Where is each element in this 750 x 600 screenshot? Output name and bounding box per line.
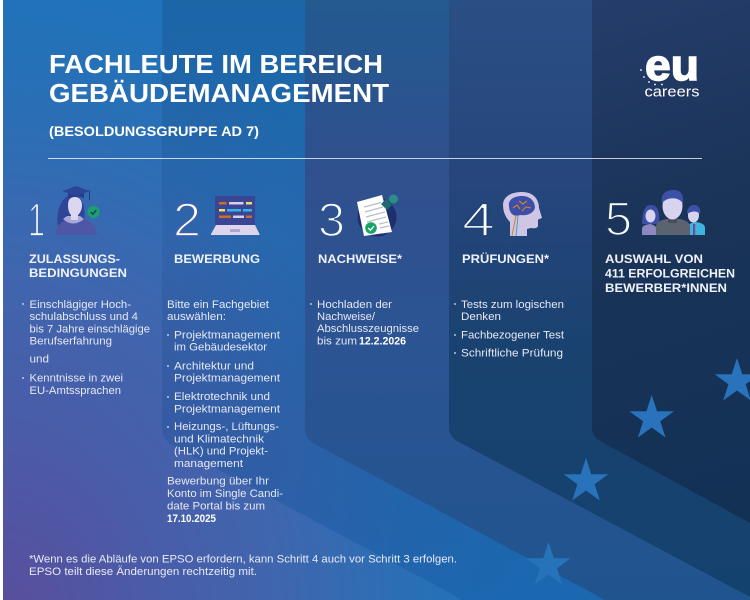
step 4 text: Schriftliche Prüfung	[461, 348, 563, 360]
step 1 text: EU-Amtssprachen	[30, 385, 121, 397]
step 5 heading: AUSWAHL VON	[605, 252, 703, 266]
icon: three people	[642, 190, 705, 235]
step 1 heading: BEDINGUNGEN	[29, 266, 127, 280]
number 1: 1	[28, 193, 45, 246]
step 1 text	[22, 299, 150, 397]
subtitle: (BESOLDUNGSGRUPPE AD 7)	[49, 123, 259, 139]
logo: EU careers: eu	[645, 41, 699, 90]
step 5 heading: BEWERBER*INNEN	[605, 281, 727, 295]
step 1 text: und	[30, 354, 49, 366]
step 2 text	[167, 299, 283, 525]
icon: laptop	[211, 196, 260, 235]
step 4 heading: PRÜFUNGEN*	[462, 251, 549, 266]
step 4 text: Denken	[461, 311, 501, 323]
step 5 heading	[605, 252, 735, 295]
title: FACHLEUTE IM BEREICH	[49, 51, 383, 79]
panel: step 3 column	[305, 0, 750, 600]
step 1 text: Einschlägiger Hoch-	[30, 299, 131, 311]
step 3 text: Hochladen der	[317, 299, 392, 311]
step 2 text: (HLK) und Projekt-	[174, 446, 268, 458]
step 3 text: Abschlusszeugnisse	[317, 323, 419, 335]
step 1 heading: ZULASSUNGS-	[29, 252, 120, 266]
step 2 text: im Gebäudesektor	[174, 342, 267, 354]
step 5 heading: 411 ERFOLGREICHEN	[605, 266, 735, 280]
step 3 text: bis zum	[317, 336, 357, 348]
step 2 text: Architektur und	[174, 360, 254, 372]
step 2 text: date Portal bis zum	[167, 500, 265, 512]
panel: step 2 column	[162, 0, 750, 600]
step 2 text: Bitte ein Fachgebiet	[167, 299, 269, 311]
step 3 text: Nachweise/	[317, 311, 375, 323]
step 4 text: Tests zum logischen	[461, 299, 564, 311]
step 2 text: und Klimatechnik	[174, 434, 265, 446]
star 1	[715, 358, 750, 400]
step 2 text: Bewerbung über Ihr	[167, 476, 269, 488]
footnote	[29, 554, 457, 578]
step 1 heading	[29, 252, 127, 280]
step 2 heading: BEWERBUNG	[174, 252, 260, 266]
step 2 text: Projektmanagement	[174, 330, 280, 342]
icon: document with stamp	[357, 194, 398, 236]
star 3	[564, 458, 608, 500]
step 2 text: management	[174, 458, 243, 470]
star 2	[629, 395, 674, 438]
title	[49, 51, 389, 108]
number 3: 3	[318, 193, 345, 246]
step 3 heading: NACHWEISE*	[318, 252, 402, 266]
step 2 text: Projektmanagement	[174, 404, 280, 416]
icon: head with brain	[503, 192, 542, 236]
step 2 text: auswählen:	[167, 311, 226, 323]
step 4 text	[454, 299, 564, 360]
step 1 text: Kenntnisse in zwei	[30, 372, 123, 384]
step 2 text: Elektrotechnik und	[174, 391, 270, 403]
panel: step 5 column	[592, 0, 750, 523]
step 4 text: Fachbezogener Test	[461, 330, 564, 342]
step 1 text: schulabschluss und 4	[30, 311, 138, 323]
number 5: 5	[605, 192, 632, 245]
star 4	[526, 542, 571, 584]
number 4: 4	[462, 193, 495, 246]
title: GEBÄUDEMANAGEMENT	[49, 80, 389, 108]
step 3 text: 12.2.2026	[359, 336, 406, 348]
step 2 text: 17.10.2025	[167, 513, 216, 525]
logo: EU careers: careers	[644, 84, 700, 100]
step 3 text	[310, 299, 419, 348]
step 2 text: Konto im Single Candi-	[167, 488, 283, 500]
step 2 text: Heizungs-, Lüftungs-	[174, 421, 279, 433]
icon: graduate	[55, 186, 100, 235]
step 1 text: Berufserfahrung	[30, 336, 112, 348]
step 2 text: Projektmanagement	[174, 372, 280, 384]
footnote: EPSO teilt diese Änderungen rechtzeitig mit.	[29, 566, 257, 578]
number 2: 2	[173, 193, 201, 246]
footnote: *Wenn es die Abläufe von EPSO erfordern, kann Schritt 4 auch vor Schritt 3 erfolgen.	[29, 554, 457, 566]
panel: step 4 column	[449, 0, 750, 597]
step 1 text: bis 7 Jahre einschlägige	[30, 324, 150, 336]
